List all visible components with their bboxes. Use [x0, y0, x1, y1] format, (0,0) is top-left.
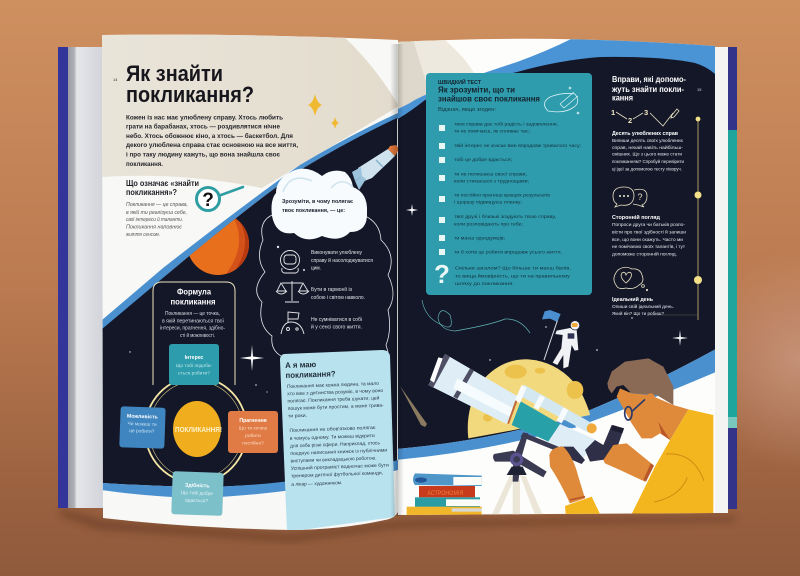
- list item 2: [311, 287, 365, 301]
- cloud outline with list: [257, 215, 393, 358]
- exercise 2: все, що вони скажуть. Часто ми: [612, 237, 683, 243]
- formula heading: [170, 288, 216, 306]
- card: ability: Що тобі добре: [181, 490, 213, 497]
- subheading: what it means: Що означає «знайти: [126, 178, 199, 188]
- intro paragraph: небо. Хтось обожнює кіно, а хтось — баскетбол. Для: [126, 132, 293, 140]
- list item 1: цим.: [311, 266, 321, 272]
- checklist text: ти не полишаєш своєї справи,: [454, 172, 527, 178]
- exercise 2: вісти про твої здібності й запиши: [612, 228, 686, 236]
- panel heading: покликання?: [285, 369, 336, 380]
- panel body: Покликання має кожна людина, та мало: [287, 381, 379, 390]
- icon: big question mark: ?: [434, 259, 450, 289]
- checklist text: твої друзі і близькі згадують твою справу,: [454, 214, 556, 220]
- exercises heading: [611, 74, 686, 102]
- spine shadow: [390, 44, 404, 516]
- icon: scales: [276, 281, 309, 302]
- exercise 2: [612, 214, 686, 258]
- dark space panel: [102, 118, 397, 487]
- timeline: [650, 117, 702, 320]
- illustration group: moon, astronaut, telescope, man, books: [407, 310, 713, 515]
- panel heading: [286, 362, 335, 378]
- moon: [468, 359, 590, 438]
- formula heading: Формула: [177, 288, 212, 296]
- icon: flag on moon: [281, 312, 304, 334]
- exercise 1: покликанням? Спробуй перевірити: [612, 158, 684, 165]
- checklist text: коли розповідають про тебе;: [454, 222, 523, 228]
- title: Як знайти: [126, 61, 223, 86]
- subheading: what it means: [126, 178, 199, 197]
- man: [549, 358, 713, 514]
- top blue band: [396, 36, 720, 122]
- diagonal blue band: [102, 113, 398, 332]
- checklist text: ти маєш однодумців;: [454, 236, 505, 242]
- card: interest: Інтерес: [185, 355, 204, 361]
- list item 2: Бути в гармонії із: [311, 287, 353, 293]
- icon: speech bubbles: [613, 187, 647, 207]
- card: possibility: це робити?: [129, 428, 155, 435]
- icon: numbered zigzag with pencil: 2: [628, 116, 632, 125]
- icon: astronaut helmet: [280, 250, 300, 273]
- icon: rocket outline: [544, 87, 579, 114]
- squiggle line: [422, 300, 530, 333]
- central circle: ПОКЛИКАННЯ!: [175, 425, 222, 434]
- panel body: хто вже з дитинства розуміє, в чому воно: [287, 388, 384, 397]
- comet: [400, 386, 427, 427]
- list item 1: [311, 250, 373, 272]
- ring diagram: [145, 377, 247, 483]
- icon: numbered zigzag with pencil: 1: [611, 108, 615, 117]
- title: [126, 61, 254, 107]
- astronaut with flag: [542, 310, 580, 368]
- book shadow: [60, 508, 735, 542]
- checklist text: тобі це добре вдається;: [454, 157, 512, 163]
- hair: [607, 358, 673, 405]
- icon: thought cloud with heart: [614, 267, 648, 291]
- quiz summary: то вища ймовірність, що ти на правильному: [455, 272, 571, 280]
- mount: [513, 433, 528, 482]
- cloud caption: твоє покликання, — це:: [282, 208, 345, 214]
- definition text: Покликання наповнює: [126, 224, 183, 230]
- checklist text: ти постійно прагнеш кращих результатів: [454, 192, 550, 198]
- forearm and hand on eyepiece: [603, 443, 653, 482]
- panel: quick test: [426, 73, 592, 295]
- icon: magnifier with question mark: [196, 187, 243, 211]
- cloud caption: [282, 199, 354, 214]
- quiz heading: знайшов своє покликання: [438, 94, 540, 104]
- books: АСТРОНОМІЯ: [427, 490, 463, 497]
- card: aspiration: робити: [245, 433, 261, 439]
- sleeve: [565, 497, 600, 514]
- finder tube: [518, 385, 593, 433]
- card: aspiration: постійно?: [242, 440, 264, 446]
- exercise 3: Ідеальний день: [612, 296, 654, 303]
- quiz heading: Як зрозуміти, що ти: [438, 86, 515, 94]
- panel text: [285, 358, 390, 488]
- tube front: [428, 354, 518, 424]
- list item 3: [311, 317, 362, 330]
- definition text: життя сенсом.: [125, 232, 160, 238]
- panel body: виступами чи викладацькою роботою.: [290, 455, 377, 464]
- list item 3: й у сенсі свого життя.: [311, 324, 362, 330]
- sweater: [632, 409, 713, 514]
- ear: [648, 393, 656, 398]
- hand on focus ring: [549, 447, 585, 503]
- white speech cloud: [272, 169, 367, 239]
- exercise 1: Випиши десять своїх улюблених: [612, 138, 684, 144]
- panel body: [287, 381, 390, 488]
- card: ability: Здібність: [185, 482, 210, 489]
- subheading: what it means: покликання»?: [126, 187, 177, 197]
- cloud caption: Зрозуміти, в чому полягає: [282, 199, 354, 205]
- checklist text: і щоразу підвищуєш планку;: [454, 200, 522, 206]
- card: possibility: [119, 406, 166, 449]
- star: big sparkle left page: [240, 345, 264, 371]
- exercise 1: ці ідеї за допомогою тесту ліворуч.: [612, 166, 682, 172]
- exercise 1: смішних. Що з цього може стати: [612, 152, 682, 158]
- panel heading: А я маю: [285, 360, 317, 370]
- checklist text: ти не помічаєш, як спливає час;: [454, 128, 530, 134]
- formula text: Покликання — це точка,: [165, 311, 220, 317]
- quiz heading: [438, 78, 540, 104]
- icon: numbered zigzag with pencil: [611, 108, 679, 126]
- neck and face: [617, 388, 688, 440]
- exercise 1: Десять улюблених справ: [612, 130, 679, 137]
- book cover and page edges: [58, 47, 737, 513]
- glasses: [625, 399, 645, 420]
- icon: speech bubbles: ?: [637, 192, 643, 202]
- exercises heading: Вправи, які допомо-: [612, 74, 686, 84]
- bottom blue band: [102, 460, 398, 498]
- icon: magnifier with question mark: ?: [202, 190, 214, 211]
- panel: do I have a calling: [280, 350, 395, 532]
- quiz heading: ШВИДКИЙ ТЕСТ: [438, 78, 481, 86]
- exercise 2: Сторонній погляд: [612, 214, 661, 221]
- top cream folds: [399, 40, 474, 82]
- intro paragraph: грати на барабанах, хтось — роздивлятися нічне: [126, 122, 280, 130]
- exercise 2: не помічаємо своїх талантів, і тут: [612, 244, 686, 250]
- definition text: [125, 202, 188, 238]
- list item 3: Не сумніватися в собі: [311, 317, 362, 323]
- card: possibility: Можливість: [127, 413, 158, 421]
- card: aspiration: [228, 411, 278, 453]
- tube rear: [548, 424, 597, 458]
- books: [407, 473, 482, 515]
- list item 2: собою і світом навколо.: [311, 295, 365, 301]
- exercise 3: Опиши свій ідеальний день.: [612, 303, 674, 310]
- formula panel: [153, 282, 235, 385]
- exercise 3: Який він? Що ти робиш?: [612, 310, 664, 317]
- icon: sparkles yellow: [308, 94, 339, 129]
- checklist text: коли стикаєшся з труднощами;: [454, 180, 529, 184]
- panel body: в чомусь одному. Ти можеш відкрити: [290, 433, 375, 442]
- list item 1: Виконувати улюблену: [311, 250, 362, 256]
- exercises heading: жуть знайти покли-: [611, 84, 684, 94]
- icon: numbered zigzag with pencil: 3: [644, 108, 648, 117]
- bottom blue band: [396, 349, 716, 460]
- panel body: Покликання не обов'язково полягає: [289, 425, 376, 434]
- checklist text: твій інтерес не згасає вже впродовж тривалого часу;: [454, 142, 581, 149]
- illustration: orange planet: [190, 218, 249, 275]
- checklist text: твоя справа дає тобі радість і задоволення,: [454, 122, 558, 128]
- panel body: Успішний програміст водночас може бути: [291, 461, 389, 472]
- quiz summary: Скільки загалом? Що більше ти маєш балів,: [455, 266, 571, 272]
- card: ability: вдається?: [185, 498, 209, 504]
- card: interest: ється робити?: [178, 370, 210, 376]
- teal section: [512, 401, 560, 442]
- intro paragraph: декого улюблена справа стає основною на все життя,: [126, 141, 298, 149]
- tripod legs: [492, 475, 543, 515]
- intro paragraph: Кожен із нас має улюблену справу. Хтось любить: [126, 114, 283, 122]
- telescope: [428, 354, 624, 515]
- eyepiece: [585, 425, 624, 462]
- right page: [395, 34, 720, 518]
- card: interest: [169, 344, 219, 385]
- panel body: тренером дитячої футбольної команди,: [291, 470, 383, 479]
- exercise 2: допоможе сторонній погляд.: [612, 250, 677, 258]
- dark space panel: [396, 57, 716, 449]
- stars right page: [406, 204, 688, 361]
- central circle: [173, 401, 222, 457]
- formula heading: покликання: [170, 298, 216, 306]
- card: aspiration: Прагнення: [239, 418, 267, 424]
- definition text: Покликання — це справа,: [126, 202, 188, 208]
- exercises heading: кання: [612, 92, 633, 102]
- card: possibility: Чи можеш ти: [127, 421, 157, 428]
- left page: [100, 30, 400, 535]
- exercise 1: справ, нехай навіть найбільш-: [612, 144, 683, 151]
- definition text: в якій ти реалізуєш себе,: [126, 209, 187, 216]
- page number 14: 14: [113, 77, 118, 82]
- definition text: свої інтереси й таланти.: [126, 216, 183, 223]
- formula text: в якій перетинаються твої: [162, 318, 225, 324]
- exercise 2: Попроси друга чи батьків розпо-: [612, 222, 685, 228]
- intro paragraph: покликання.: [126, 161, 163, 168]
- panel body: пошук може бути простим, а може трива-: [288, 403, 384, 412]
- beige header area: [102, 33, 399, 188]
- quiz summary: шляху до покликання.: [455, 282, 514, 287]
- small stars: [129, 246, 305, 393]
- card: interest: Що тобі подоба-: [176, 363, 212, 369]
- page number 15: 15: [697, 87, 702, 92]
- exercise 3: [612, 296, 674, 317]
- quiz summary: [455, 266, 571, 287]
- checklist text: ти б хотів це робити впродовж усього життя.: [454, 250, 562, 256]
- checklist text: [454, 122, 581, 256]
- panel body: ти роки.: [288, 414, 307, 419]
- quiz instruction: Відзнач, якщо згоден:: [438, 107, 496, 113]
- formula text: сті й можливості.: [180, 332, 215, 339]
- intro paragraph: і про таку людину кажуть, що вона знайшла своє: [126, 150, 280, 158]
- panel body: полягає. Покликання треба шукати; цей: [287, 394, 380, 405]
- formula text: інтереси, прагнення, здібно-: [160, 326, 225, 332]
- illustration: rocket: [352, 145, 399, 190]
- panel body: поєднує написання книжок із публічними: [290, 448, 388, 457]
- intro paragraph: [126, 114, 298, 168]
- formula text: [160, 311, 225, 339]
- list item 1: справу й насолоджуватися: [311, 257, 373, 264]
- card: aspiration: Що ти хочеш: [239, 426, 267, 432]
- checkboxes: [439, 125, 445, 255]
- panel body: а лікар — художником.: [291, 480, 342, 488]
- title: покликання?: [126, 82, 254, 107]
- panel body: для себе різні сфери. Наприклад, хтось: [290, 440, 381, 449]
- card: ability: [171, 471, 224, 516]
- exercise 1: [612, 130, 684, 172]
